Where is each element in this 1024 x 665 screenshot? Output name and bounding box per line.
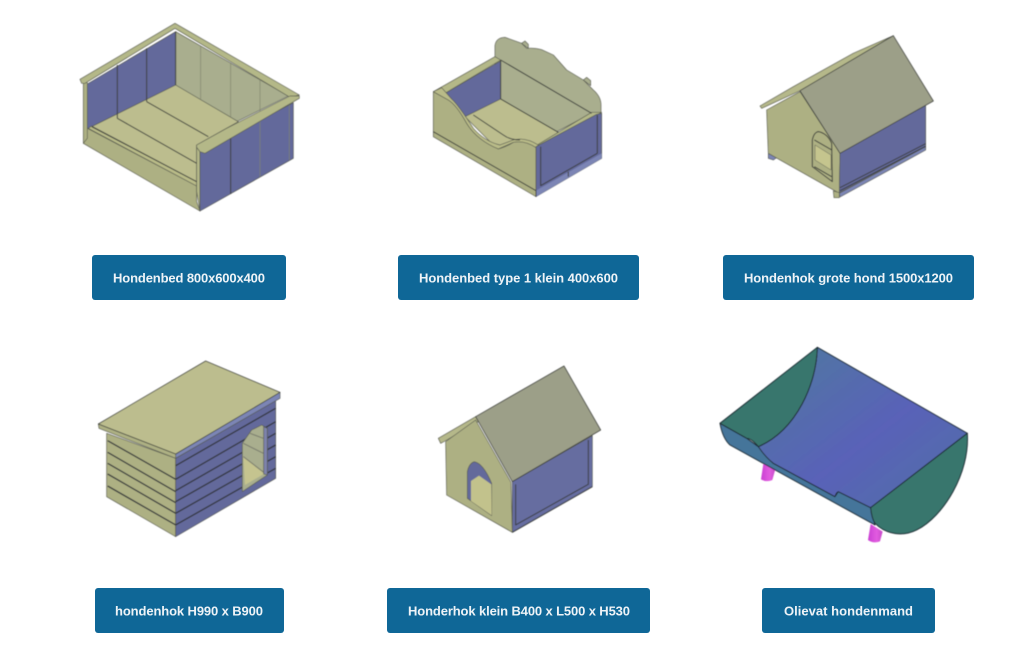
button: Hondenbed type 1 klein 400x600: Hondenbed type 1 klein 400x600 bbox=[419, 270, 618, 286]
button: Hondenhok grote hond 1500x1200 bbox=[723, 255, 974, 300]
icon: honderhok klein drawing bbox=[438, 366, 601, 532]
button: Honderhok klein B400 x L500 x H530: Honderhok klein B400 x L500 x H530 bbox=[408, 604, 630, 618]
button: Hondenbed type 1 klein 400x600 bbox=[398, 255, 639, 300]
button: Hondenhok grote hond 1500x1200: Hondenhok grote hond 1500x1200 bbox=[744, 270, 953, 286]
button: Olievat hondenmand: Olievat hondenmand bbox=[784, 604, 913, 618]
icon: hondenhok grote hond drawing bbox=[760, 36, 933, 198]
icon: hondenbed 800x600x400 drawing bbox=[80, 23, 299, 211]
button: Hondenbed 800x600x400: Hondenbed 800x600x400 bbox=[113, 270, 265, 286]
icon: hondenbed type 1 drawing bbox=[433, 37, 602, 197]
button: Hondenbed 800x600x400 bbox=[92, 255, 286, 300]
button: hondenhok H990 x B900: hondenhok H990 x B900 bbox=[115, 604, 263, 618]
button: Honderhok klein B400 x L500 x H530 bbox=[387, 588, 650, 633]
icon: hondenhok H990 x B900 drawing bbox=[98, 361, 280, 537]
icon: olievat hondenmand drawing bbox=[720, 347, 967, 542]
button: hondenhok H990 x B900 bbox=[95, 588, 284, 633]
button: Olievat hondenmand bbox=[762, 588, 935, 633]
